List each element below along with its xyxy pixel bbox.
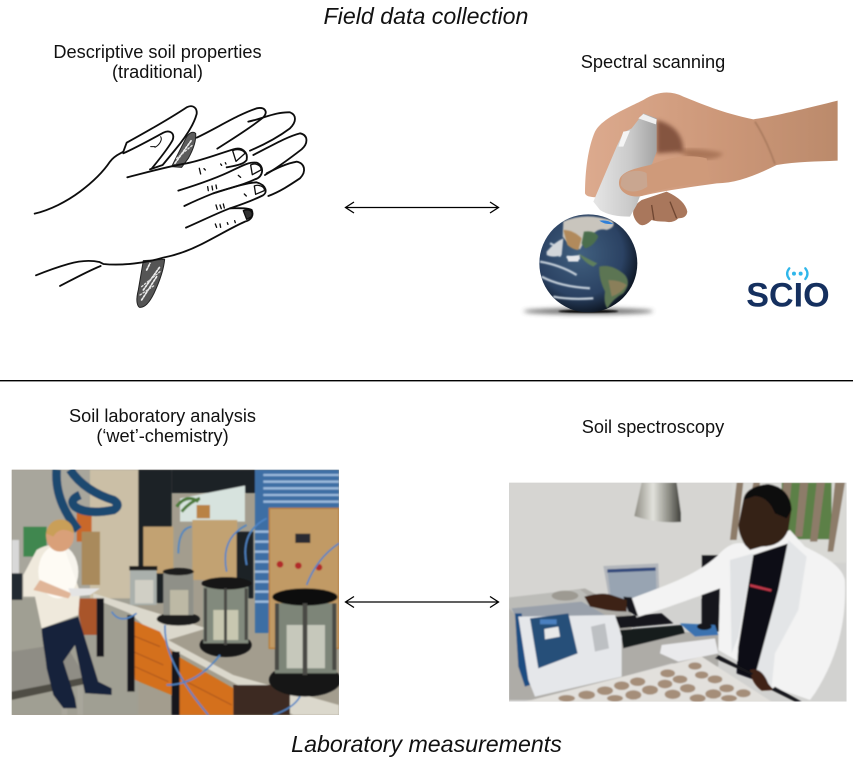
- steel table: [12, 647, 82, 692]
- heading: descriptive soil properties: [53, 42, 262, 82]
- heading: soil laboratory analysis: Soil laboratory analysis: [69, 406, 256, 426]
- heading: descriptive soil properties: (traditional): [112, 62, 203, 82]
- photo: soil spectroscopy laboratory: [509, 483, 847, 702]
- sample tray: [525, 657, 772, 702]
- nails: [233, 150, 245, 161]
- hand: [585, 93, 838, 225]
- image: hand scanning the globe with a SCIO device: [523, 93, 838, 315]
- icon: hand drawing with soil: [35, 106, 306, 307]
- globe: [539, 214, 637, 312]
- title: laboratory measurements: Laboratory measurements: [291, 731, 562, 757]
- scanner device: [593, 113, 657, 217]
- heading: soil laboratory analysis: (‘wet’-chemistry): [96, 426, 229, 446]
- heading: soil laboratory analysis: [69, 406, 256, 446]
- logo signal mark: [787, 268, 807, 279]
- arrow: field double-headed arrow: [346, 202, 498, 213]
- soil smear on lower palm: [137, 259, 165, 307]
- title: field data collection: Field data collection: [324, 3, 528, 29]
- thumb: [619, 156, 710, 196]
- arrow: laboratory double-headed arrow: [346, 596, 498, 608]
- heading: soil spectroscopy: Soil spectroscopy: [582, 417, 725, 437]
- back fingers: [633, 192, 687, 225]
- divider line: [0, 380, 853, 381]
- knuckle marks: [199, 163, 246, 227]
- benches: [93, 593, 339, 715]
- palm and forearm: [585, 93, 838, 197]
- person: [42, 617, 112, 708]
- heading: spectral scanning: Spectral scanning: [581, 52, 725, 72]
- outline strokes: [35, 106, 197, 214]
- heading: descriptive soil properties: Descriptive soil properties: [53, 42, 262, 62]
- monitors and workstation: [702, 555, 732, 632]
- photo: wet chemistry laboratory: [12, 470, 341, 715]
- instrument: [509, 590, 589, 612]
- vessels: [129, 566, 341, 697]
- ground shadow: [523, 308, 653, 314]
- man: [632, 530, 845, 700]
- logo: SCIO: SCIO: [746, 277, 830, 315]
- soil smear between fingers: [172, 132, 196, 167]
